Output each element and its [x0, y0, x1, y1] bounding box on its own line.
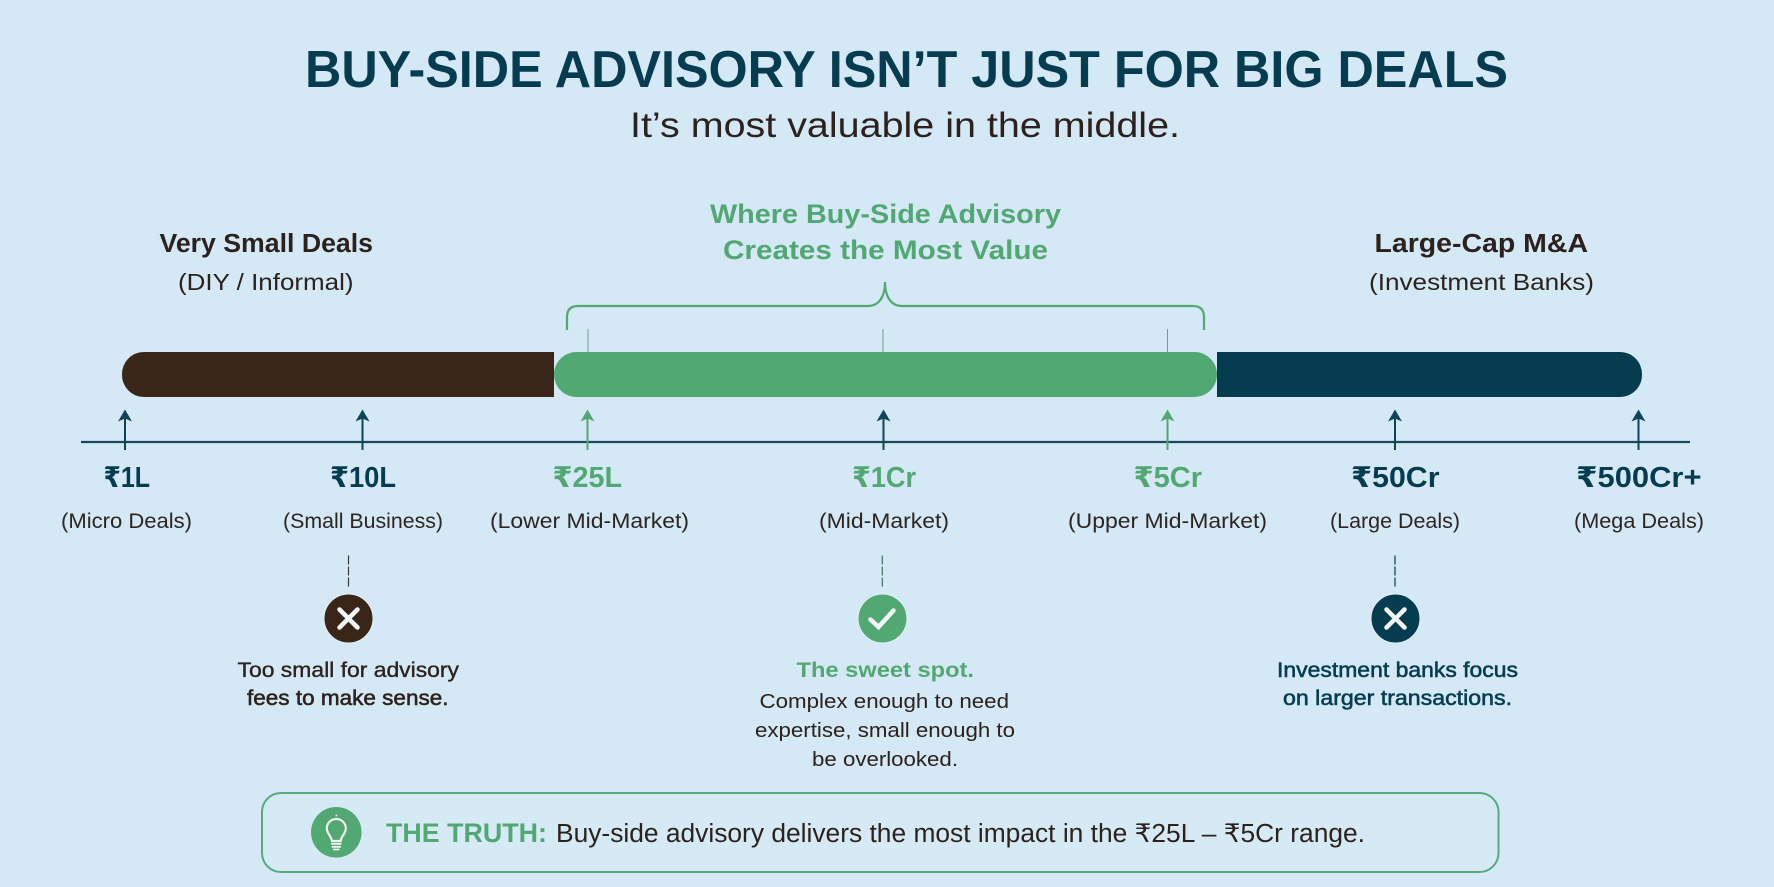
scale point: ₹25L lower mid-market [490, 462, 689, 533]
note: the sweet spot: expertise, small enough to [755, 719, 1015, 742]
heading: very small deals: Very Small Deals [160, 230, 373, 258]
note: the sweet spot: be overlooked. [812, 748, 958, 771]
scale point: ₹500Cr+ mega deals: ₹500Cr+ [1576, 462, 1702, 494]
note: the sweet spot: The sweet spot. [796, 658, 974, 682]
scale point: ₹1Cr mid-market: (Mid-Market) [819, 510, 949, 533]
callout: the truth [262, 793, 1498, 872]
scale point: ₹50Cr large deals: (Large Deals) [1330, 510, 1460, 533]
heading: where buy-side advisory creates the most value: Where Buy-Side Advisory [710, 199, 1061, 229]
scale point: ₹500Cr+ mega deals: (Mega Deals) [1574, 510, 1704, 533]
note: investment banks focus: on larger transactions. [1283, 687, 1512, 710]
scale point: ₹500Cr+ mega deals [1574, 462, 1704, 533]
heading: very small deals: (DIY / Informal) [178, 269, 354, 295]
heading: large-cap M&A: Large-Cap M&A [1374, 230, 1588, 258]
scale point: ₹1Cr mid-market: ₹1Cr [852, 462, 916, 494]
scale point: ₹10L small business: (Small Business) [283, 510, 443, 533]
axis line [81, 441, 1690, 443]
note: the sweet spot: Complex enough to need [760, 690, 1009, 713]
scale point: ₹50Cr large deals: ₹50Cr [1351, 462, 1440, 494]
heading: large-cap M&A [1369, 230, 1594, 295]
heading: where buy-side advisory creates the most value [710, 199, 1061, 265]
scale point: ₹1L micro deals: (Micro Deals) [61, 510, 192, 533]
note: the sweet spot [755, 658, 1015, 771]
subtitle: It’s most valuable in the middle. [630, 106, 1180, 145]
segment bar: large-cap [1217, 352, 1642, 397]
icon: green check [858, 594, 907, 643]
scale point: ₹1L micro deals [61, 462, 192, 533]
note: investment banks focus [1277, 659, 1518, 710]
icon: light bulb [311, 807, 362, 858]
callout: the truth: THE TRUTH: [386, 818, 547, 848]
scale point: ₹5Cr upper mid-market: ₹5Cr [1134, 462, 1202, 494]
scale point: ₹10L small business: ₹10L [330, 462, 396, 494]
scale point: ₹5Cr upper mid-market: (Upper Mid-Market) [1068, 510, 1267, 533]
scale point: ₹10L small business [283, 462, 443, 533]
heading: large-cap M&A: (Investment Banks) [1369, 269, 1594, 295]
heading: very small deals [160, 230, 373, 295]
scale point: ₹50Cr large deals [1330, 462, 1460, 533]
note: investment banks focus: Investment banks focus [1277, 659, 1518, 682]
note: too small for advisory: fees to make sense. [247, 687, 448, 710]
scale point: ₹25L lower mid-market: (Lower Mid-Market) [490, 510, 689, 533]
title: BUY-SIDE ADVISORY ISN’T JUST FOR BIG DEALS [305, 41, 1508, 99]
icon: navy cross [1371, 594, 1420, 643]
scale point: ₹5Cr upper mid-market [1068, 462, 1267, 533]
dashed connectors [348, 556, 1395, 587]
axis arrows [118, 410, 1646, 450]
scale point: ₹25L lower mid-market: ₹25L [552, 462, 622, 494]
bracket over mid-market range [567, 282, 1204, 330]
callout: the truth: Buy-side advisory delivers the most impact in the ₹25L – ₹5Cr range. [556, 820, 1365, 848]
segment bar: advisory sweet spot [554, 352, 1217, 397]
icon: brown cross [324, 594, 373, 643]
note: too small for advisory: Too small for advisory [238, 659, 460, 682]
bracket ticks [588, 329, 1168, 352]
scale point: ₹1L micro deals: ₹1L [104, 462, 150, 494]
note: too small for advisory [238, 659, 460, 710]
scale point: ₹1Cr mid-market [819, 462, 949, 533]
segment bar: very small deals [122, 352, 554, 397]
heading: where buy-side advisory creates the most value: Creates the Most Value [723, 235, 1048, 265]
